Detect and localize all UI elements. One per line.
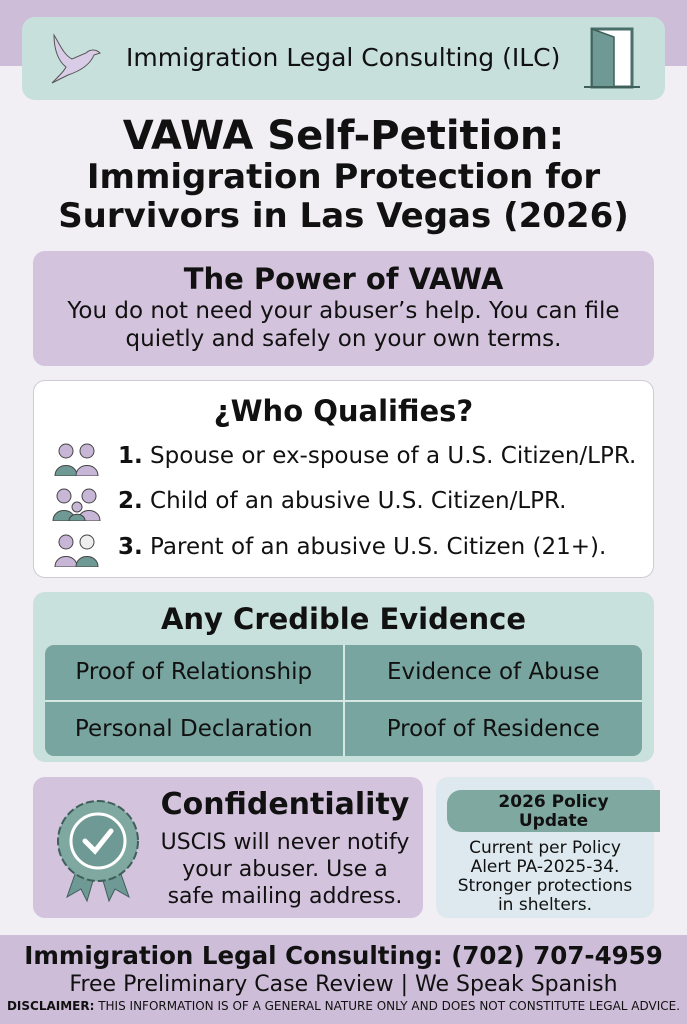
heading: The Power of VAWA [184, 262, 503, 296]
text [458, 838, 632, 915]
evidence grid: Personal Declaration [75, 716, 313, 742]
item 2: 2. Child of an abusive U.S. Citizen/LPR. [118, 488, 566, 514]
text: quietly and safely on your own terms. [126, 326, 561, 352]
evidence grid: Evidence of Abuse [387, 659, 600, 685]
item 1: 1. Spouse or ex-spouse of a U.S. Citizen/LPR. [118, 443, 636, 469]
tab: Update [519, 811, 588, 831]
text: Current per Policy [469, 838, 621, 858]
text: You do not need your abuser’s help. You can file [67, 298, 620, 324]
disclaimer: DISCLAIMER: THIS INFORMATION IS OF A GENERAL NATURE ONLY AND DOES NOT CONSTITUTE LEGAL ADVICE. [7, 999, 680, 1013]
header text: Immigration Legal Consulting (ILC) [126, 43, 560, 72]
icon: dove [52, 33, 101, 84]
text: USCIS will never notify [161, 830, 409, 855]
evidence grid [45, 645, 642, 756]
text [67, 298, 620, 352]
text [161, 830, 409, 909]
tab: 2026 Policy [498, 792, 609, 812]
text: your abuser. Use a [182, 857, 388, 882]
text: Alert PA-2025-34. [471, 857, 619, 877]
text: Stronger protections [458, 876, 632, 896]
panel: who qualifies [33, 380, 654, 578]
services: Free Preliminary Case Review | We Speak Spanish [69, 972, 618, 997]
text: in shelters. [498, 895, 592, 915]
header bar [22, 17, 665, 100]
evidence grid: Proof of Residence [387, 716, 600, 742]
title [58, 113, 629, 236]
text: safe mailing address. [168, 884, 402, 909]
item 3 [54, 534, 606, 567]
item 2 [52, 488, 566, 521]
heading: Confidentiality [161, 787, 409, 822]
icon: open door [584, 28, 640, 88]
icon: badge [57, 800, 139, 902]
tab [447, 790, 660, 832]
heading: ¿Who Qualifies? [214, 394, 473, 428]
title: VAWA Self-Petition: [123, 113, 564, 159]
footer [0, 935, 687, 1024]
phone: Immigration Legal Consulting: (702) 707-4959 [24, 941, 663, 970]
panel: confidentiality [33, 777, 423, 918]
panel: power of VAWA [33, 251, 654, 366]
heading: Any Credible Evidence [161, 602, 526, 636]
panel: policy update [436, 777, 654, 918]
panel: evidence [33, 592, 654, 762]
title: Immigration Protection for [87, 157, 600, 197]
evidence grid: Proof of Relationship [75, 659, 312, 685]
item 3: 3. Parent of an abusive U.S. Citizen (21+). [118, 534, 606, 560]
title: Survivors in Las Vegas (2026) [58, 196, 629, 236]
